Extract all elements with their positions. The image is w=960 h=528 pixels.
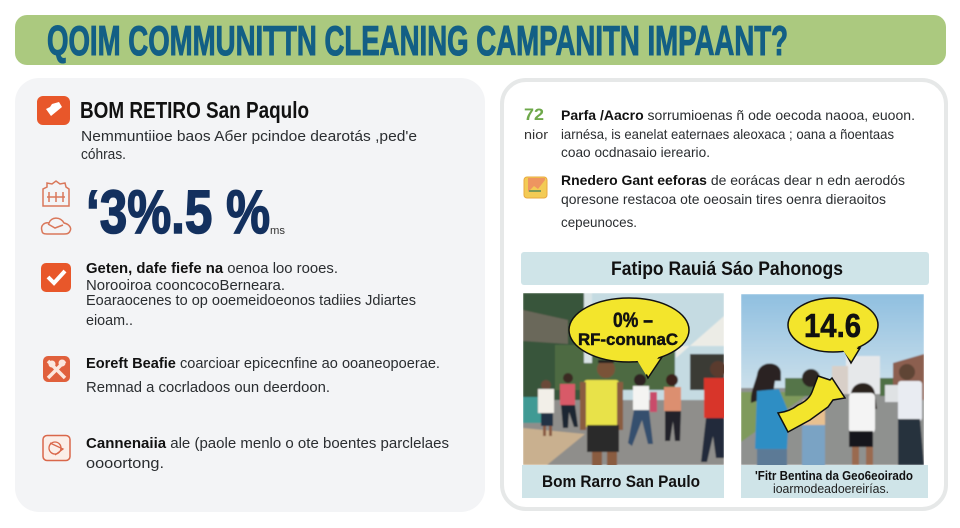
speech bubble: percentage: RF-conunaC xyxy=(578,330,678,349)
text block: second finding xyxy=(561,172,905,230)
speech bubble: percentage: 0% – xyxy=(613,309,653,332)
item text: Eoreft Beafie coarcioar epicecnfine ao ooaneopoerae. xyxy=(86,356,440,372)
icon: building and cloud xyxy=(42,181,71,234)
person: man in white shirt xyxy=(898,364,924,465)
item text: Geten, dafe fiefe na oenoa loo rooes. xyxy=(86,261,338,277)
icon: outlined badge xyxy=(43,436,70,460)
panel heading: BOM RETIRO San Paqulo xyxy=(80,97,309,123)
caption xyxy=(522,465,724,498)
panel: left location summary xyxy=(15,78,485,512)
item text: Remnad a cocrladoos oun deerdoon. xyxy=(86,380,330,396)
green stat label: 72 xyxy=(524,105,544,124)
panel: right evidence xyxy=(502,80,946,509)
photo card: Bom Retiro street xyxy=(522,293,726,498)
title banner xyxy=(15,15,946,65)
caption: 'Fitr Bentina da Geo6eoirado xyxy=(755,469,913,483)
list item: community xyxy=(43,436,449,472)
green stat label: nior xyxy=(524,127,549,142)
icon: orange badge xyxy=(37,96,70,125)
person: pink shirt xyxy=(560,373,578,428)
photo: volunteers on a street xyxy=(523,293,726,466)
text block: second finding: cepeunoces. xyxy=(561,214,637,230)
item text: eioam.. xyxy=(86,313,133,329)
caption: ioarmodeadoereirías. xyxy=(773,482,889,496)
icon: tools xyxy=(43,356,70,382)
big statistic: ms xyxy=(270,225,286,237)
text block: first finding: coao ocdnasaio iereario. xyxy=(561,144,710,160)
person: woman behind arrow xyxy=(802,369,825,467)
speech bubble: value: 14.6 xyxy=(804,307,861,344)
item text: oooortong. xyxy=(86,456,164,472)
speech bubble: percentage xyxy=(569,298,689,378)
item text: Cannenaiia ale (paole menlo o ote boentes parclelaes xyxy=(86,436,449,452)
photo: residents on a road xyxy=(741,294,924,469)
panel intro text xyxy=(81,129,417,163)
person: orange shirt xyxy=(664,374,681,441)
item text: Eoaraocenes to op ooemeidoeonos tadiies Jdiartes xyxy=(86,293,416,309)
text block: first finding xyxy=(561,107,915,160)
text block: first finding: Parfa /Aacro sorrumioenas ñ ode oecoda naooa, euoon. xyxy=(561,107,915,123)
section heading bar: Fatipo Rauiá Sáo Pahonogs xyxy=(611,259,843,280)
icon: yellow note xyxy=(524,177,547,198)
person: red shirt xyxy=(701,361,726,462)
caption: Bom Rarro San Paulo xyxy=(542,473,700,491)
person: woman in white xyxy=(849,383,877,465)
person: volunteer in vest xyxy=(580,360,623,466)
caption xyxy=(741,465,928,498)
item text: Norooiroa cooncocoBerneara. xyxy=(86,278,285,294)
panel intro text: Nemmuntiioe baos Aбer pcindoe dearotás ,ped'e xyxy=(81,129,417,145)
arrow: yellow pointer xyxy=(778,376,845,432)
photo card: community measurement xyxy=(741,294,928,498)
green stat label xyxy=(524,105,549,142)
item text xyxy=(86,436,449,472)
list item: tools xyxy=(43,356,440,396)
person: walking woman xyxy=(628,374,657,446)
icon: check xyxy=(41,263,71,292)
section heading bar xyxy=(521,252,929,285)
speech bubble: value xyxy=(788,298,878,363)
item text xyxy=(86,356,440,396)
person: woman in blue xyxy=(751,364,789,469)
item text xyxy=(86,261,416,329)
text block: first finding: iarnésa, is eanelat eaternaes aleoxaca ; oana a ñoentaas xyxy=(561,126,894,142)
text block: second finding: qoresone restacoa ote oeosain tires oenra dieraoitos xyxy=(561,191,886,207)
panel intro text: cóhras. xyxy=(81,147,126,163)
text block: second finding: Rnedero Gant eeforas de eorácas dear n edn aerodós xyxy=(561,172,905,188)
list item: check xyxy=(41,261,416,329)
big statistic: ‘3%.5 % xyxy=(86,178,270,246)
person: left child xyxy=(538,380,554,436)
